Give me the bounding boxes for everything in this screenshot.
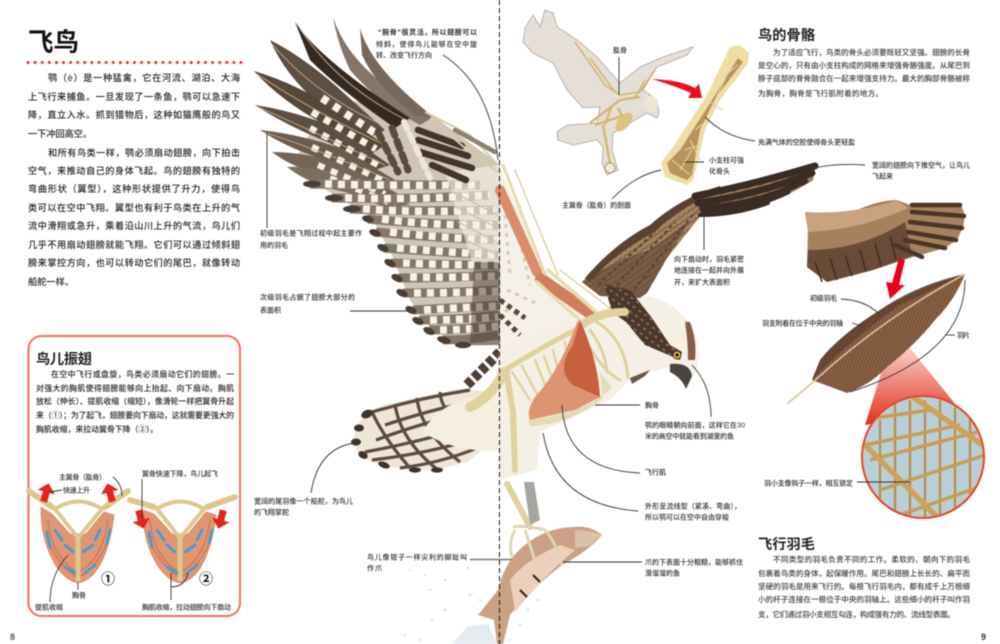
intro text: 船舵一样。 — [28, 276, 74, 287]
panel text: 在空中飞行或盘旋，鸟类必须扇动它们的翅膀。一 — [51, 369, 234, 379]
diagram labels: ① — [101, 571, 115, 587]
left page labels: 表面积 — [260, 306, 281, 314]
illustration: water splash — [404, 567, 539, 644]
panel text — [36, 369, 234, 434]
diagram labels — [35, 469, 231, 612]
right page labels: 羽片 — [957, 330, 970, 340]
primary feathers — [254, 17, 432, 207]
right page labels: 米的高空中就能看到湖里的鱼 — [645, 432, 734, 440]
intro text: 几乎不用扇动翅膀就能飞翔。它们可以通过倾斜翅 — [28, 239, 240, 250]
illustration: zoom cone — [865, 348, 960, 425]
illustration: small wing — [805, 200, 965, 282]
title: 飞鸟 — [28, 29, 79, 57]
left page labels: 宽阔的尾羽像一个船舵，为鸟儿 — [254, 496, 353, 506]
right page labels: 外形呈流线型（紧凑、弯曲）， — [645, 502, 741, 510]
right page labels: 开，来扩大表面积 — [674, 278, 730, 286]
diagram 1: wings rising — [29, 477, 128, 602]
right page labels: 地连接在一起并向外展 — [674, 266, 744, 274]
intro text: 类可以在空中飞翔。翼型也有利于鸟类在上升的气 — [28, 202, 240, 213]
icon: red arrow to feather — [886, 258, 905, 299]
right page labels: 化骨头 — [709, 166, 730, 176]
left page: text column — [28, 29, 241, 287]
left page labels: 倾斜，使得鸟儿能够在空中旋 — [376, 40, 477, 48]
centre fold dashed line — [498, 0, 500, 644]
page number 9: 9 — [981, 632, 986, 642]
right page labels: 羽支附着在位于中央的羽轴 — [762, 318, 843, 328]
right page text: bird skeleton — [758, 27, 970, 98]
right page labels: 飞行肌 — [645, 468, 666, 476]
diagram labels: 胸肌收缩，拉动翅膀向下扇动 — [142, 602, 231, 612]
panel text: 来（①）；为了起飞，翅膀要向下扇动，这就需要更强大的 — [36, 410, 234, 420]
illustration: feather — [787, 274, 965, 404]
lower leg — [524, 482, 540, 525]
right page labels: 飞起来 — [872, 172, 893, 180]
illustration: skeleton bird silhouette — [523, 10, 693, 175]
intro text: 空气，来推动自己的身体飞起。鸟的翅膀有独特的 — [28, 165, 240, 176]
left page labels: 初级羽毛是飞翔过程中起主要作 — [260, 228, 362, 238]
right page labels: 充满气体的空腔使得骨头更轻盈 — [758, 138, 855, 146]
right page labels: 鹗的眼睛朝向前面，这样它在30 — [645, 420, 745, 430]
diagram labels: 提肌收缩 — [35, 602, 63, 612]
diagram 2: wings beating down — [130, 479, 235, 600]
intro text: 一下冲回高空。 — [28, 128, 92, 139]
right page text: flight feathers: 支，它们通过羽小支相互勾连，构成强有力的、流线型表面。 — [758, 609, 955, 619]
dark inner feather patch — [470, 262, 500, 345]
left page labels: 的飞翔掌舵 — [254, 508, 289, 516]
left page labels: 转、改变飞行方向 — [376, 50, 432, 60]
illustration: fish — [478, 526, 602, 644]
illustration: humerus cross-section — [661, 45, 749, 185]
icon: red arrow to bone — [652, 79, 702, 98]
illustration: osprey tail — [351, 352, 505, 473]
right page labels — [562, 46, 970, 578]
intro text: 弯曲形状（翼型），这种形状提供了升力，使得鸟 — [28, 183, 240, 194]
chest muscle — [529, 320, 600, 420]
red dotted divider — [28, 61, 241, 64]
diagram labels: 快速上升 — [63, 486, 90, 494]
right page labels: 肱骨 — [613, 46, 627, 54]
intro text: 和所有鸟类一样，鹗必须扇动翅膀，向下拍击 — [48, 147, 240, 158]
illustration: osprey body and head — [470, 165, 698, 527]
beak and eye — [670, 364, 692, 389]
illustration: barbule magnified circle — [860, 395, 990, 525]
left page labels: 鸟儿像钳子一样尖利的脚趾叫 — [367, 552, 467, 562]
intro text: 上飞行来捕鱼。一旦发现了一条鱼，鹗可以急速下 — [28, 91, 240, 102]
right page labels: 胸骨 — [645, 400, 659, 410]
secondary feather tips — [303, 181, 471, 348]
skeleton — [470, 312, 628, 527]
right page labels: 初级羽毛 — [810, 294, 837, 302]
panel heading: 鸟儿振翅 — [36, 351, 92, 368]
panel text: 放松（伸长）、提肌收缩（缩短），像滑轮一样把翼骨升起 — [36, 396, 234, 406]
leader lines — [267, 55, 965, 562]
right page text: flight feathers — [758, 536, 970, 619]
right page labels: 滑溜溜的鱼 — [645, 568, 680, 578]
panel: bird flapping box — [28, 336, 240, 616]
right page labels: 主翼骨（肱骨）的剖面 — [562, 200, 631, 210]
intro text: 鹗（è）是一种猛禽，它在河流、湖泊、大海 — [48, 72, 240, 83]
page number 8: 8 — [10, 632, 15, 642]
left page labels: 次级羽毛占据了翅膀大部分的 — [260, 292, 355, 302]
right page labels: 所以鹗可以在空中自由穿梭 — [645, 512, 729, 522]
right page text: bird skeleton: 脖子底部的脊骨融合在一起来增强支持力。最大的胸部骨骼被称 — [758, 73, 970, 83]
white underwing and body — [500, 168, 580, 345]
wing base — [295, 100, 500, 346]
diagram labels: 胸骨 — [72, 590, 86, 600]
right page labels: 宽阔的翅膀向下推空气，让鸟儿 — [872, 160, 970, 170]
pale arm feathers — [445, 165, 500, 262]
right page text: flight feathers: 不同类型的羽毛负责不同的工作。柔软的、朝向下的羽毛 — [773, 554, 970, 564]
right page labels: 小支柱可强 — [709, 156, 744, 164]
right page text: bird skeleton: 是空心的，只有由小支柱构成的网格来增强骨骼强度。从尾巴到 — [758, 60, 970, 70]
illustration: osprey right wing — [582, 165, 815, 298]
wrist bones — [425, 112, 498, 172]
left page labels — [254, 28, 477, 572]
left page labels: “腕骨”很灵活，所以翅膀可以 — [378, 28, 477, 36]
intro text: 降，直立入水。抓到猎物后，这种如猫鹰般的鸟又 — [28, 109, 240, 120]
panel text: 对强大的胸肌使得翅膀能够向上抬起、向下扇动。胸肌 — [36, 383, 234, 393]
heading: bird skeleton: 鸟的骨骼 — [758, 27, 815, 44]
right page text: flight feathers: 坚硬的羽毛是用来飞行的。每根飞行羽毛内，都有成千上万根细 — [758, 581, 970, 591]
intro text: 膀来掌控方向，也可以转动它们的尾巴，就像转动 — [28, 257, 240, 268]
back and neck brown — [604, 284, 682, 360]
intro text: 流中滑翔或急升，乘着沿山川上升的气流，鸟儿们 — [28, 220, 240, 231]
right page text: bird skeleton: 为胸骨，胸骨是飞行肌附着的地方。 — [758, 88, 883, 98]
right page labels: 爪的下表面十分粗糙，能够抓住 — [645, 558, 743, 566]
left page labels: 用的羽毛 — [260, 240, 288, 250]
intro text — [28, 72, 240, 287]
right page text: flight feathers: 小的杆子连接在一根位于中央的羽轴上。这些细小的杆子叫作羽 — [758, 594, 970, 604]
wrist coverts — [378, 122, 472, 180]
panel text: 胸肌收缩，来拉动翼骨下降（②）。 — [36, 424, 158, 434]
right page text: flight feathers: 包裹着鸟类的身体，起保暖作用。尾巴和翅膀上长长的、扁平而 — [758, 568, 970, 578]
diagram labels: 翼骨快速下降，鸟儿起飞 — [142, 469, 218, 478]
secondary feathers — [310, 184, 498, 340]
arm muscles and bones — [500, 165, 615, 325]
right page text: bird skeleton: 为了适应飞行，鸟类的骨头必须要既轻又坚强。翅膀的长骨 — [773, 47, 970, 57]
right page labels: 羽小支像钩子一样，相互锁定 — [764, 478, 853, 488]
diagram labels: ② — [199, 571, 213, 587]
left page labels: 作爪 — [367, 564, 382, 572]
diagram labels: 主翼骨（肱骨） — [59, 472, 106, 482]
illustration: osprey left wing — [254, 17, 500, 348]
right page labels: 向下扇动时，羽毛紧密 — [674, 254, 744, 264]
heading: flight feathers: 飞行羽毛 — [758, 536, 815, 553]
